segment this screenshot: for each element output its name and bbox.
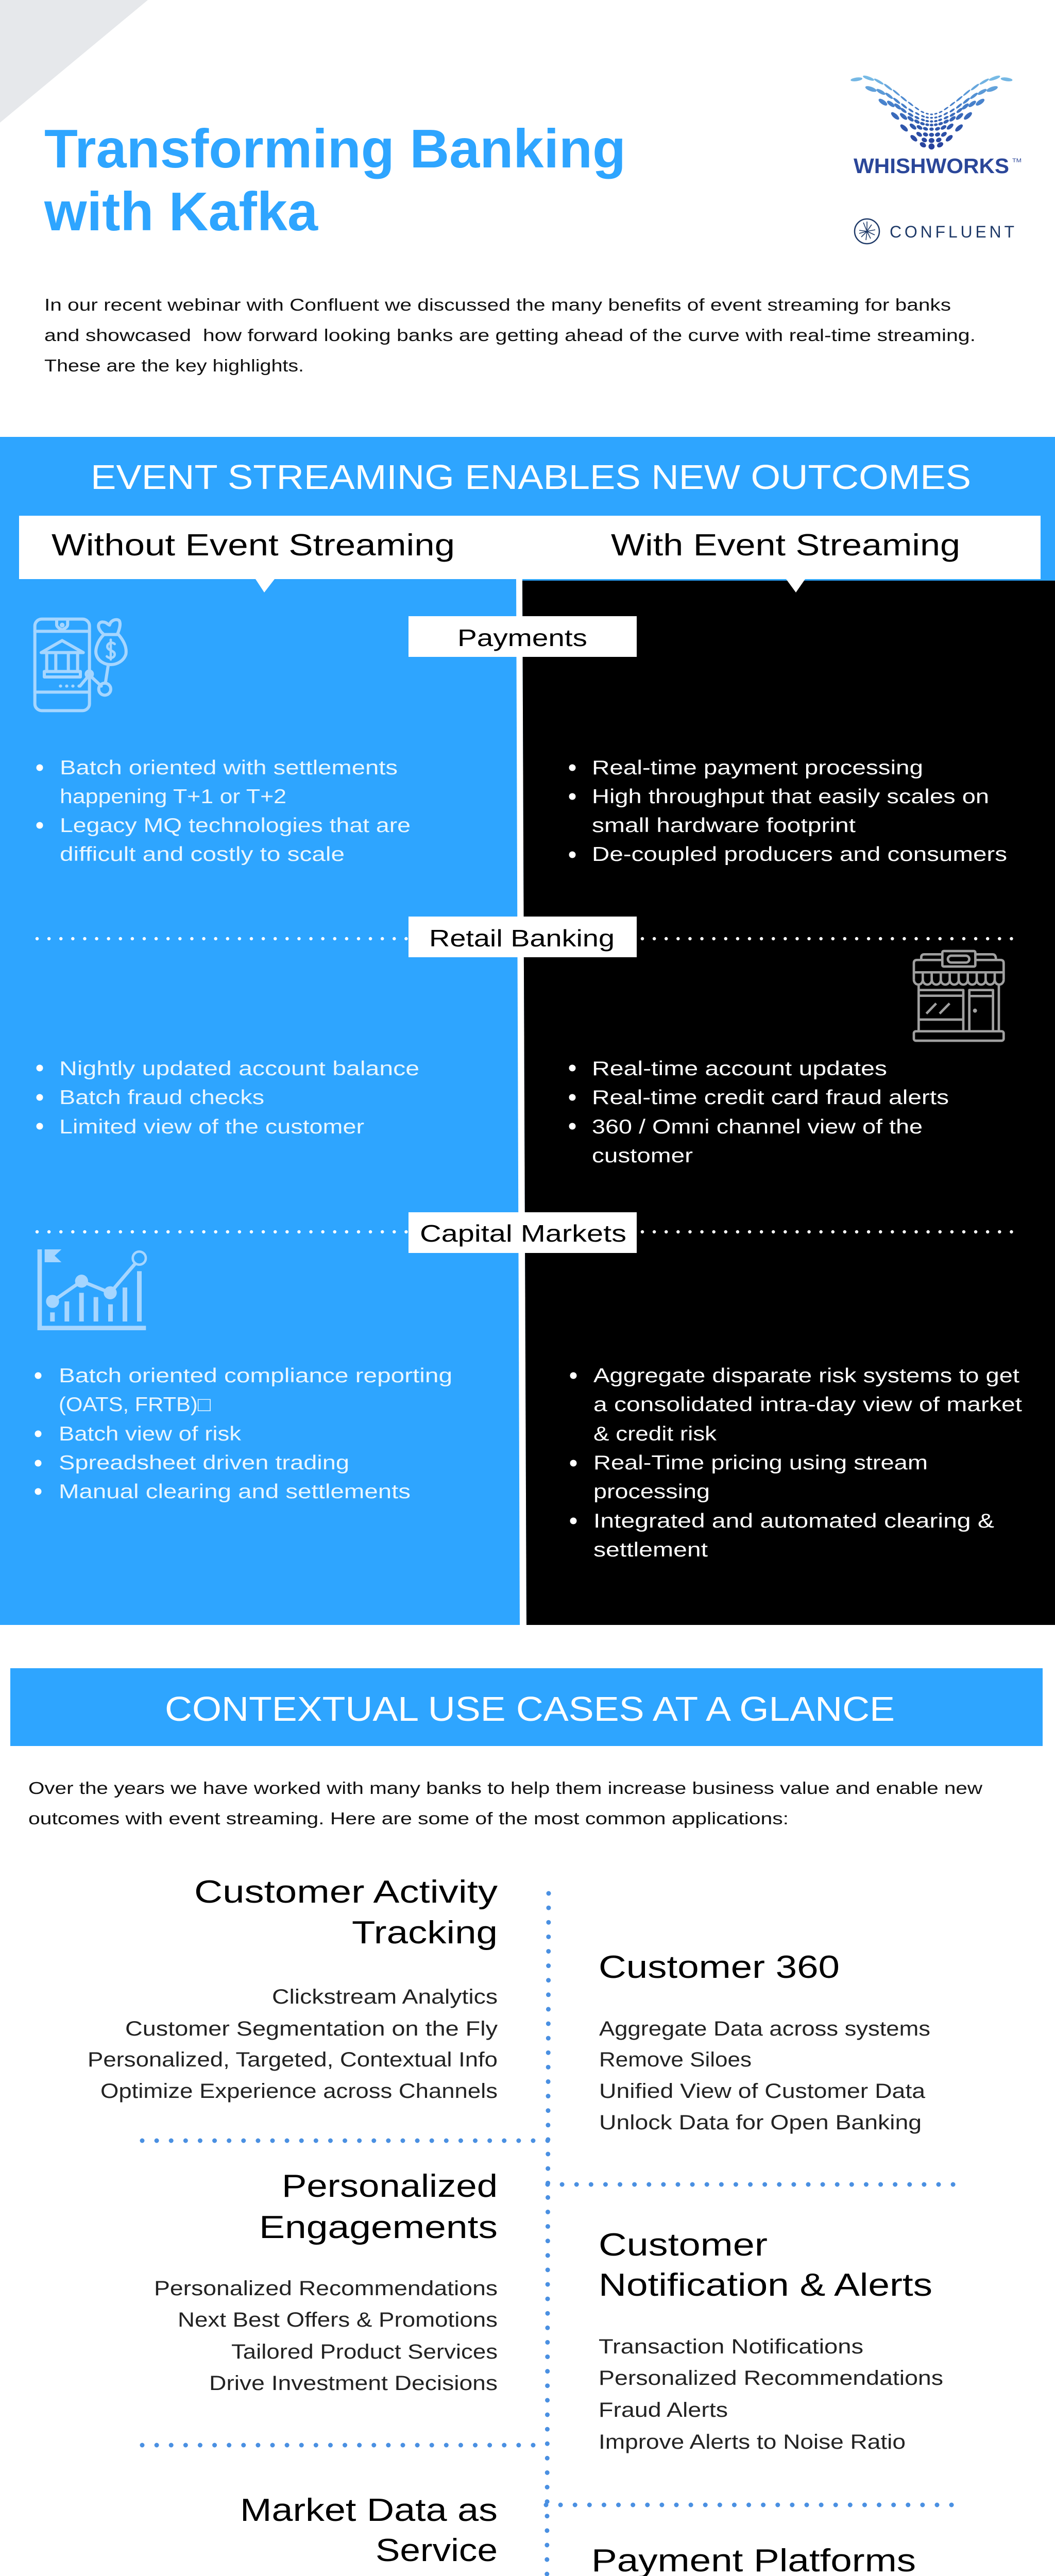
- retail banking: with event streaming: Real-time account updates: [592, 1058, 887, 1080]
- use case: Personalized Engagements: Drive Investment Decisions: [209, 2372, 498, 2395]
- label: Retail Banking: [409, 917, 637, 957]
- title: with Kafka: [44, 181, 318, 242]
- capital markets: with event streaming: Integrated and automated clearing &: [593, 1510, 994, 1532]
- retail banking: without event streaming: Limited view of the customer: [59, 1116, 364, 1138]
- use cases intro paragraph: outcomes with event streaming. Here are some of the most common applications:: [28, 1809, 789, 1828]
- icon: mobile banking: [35, 619, 126, 710]
- use case: Personalized Engagements: Next Best Offers & Promotions: [178, 2309, 498, 2331]
- retail banking: with event streaming: customer: [592, 1145, 693, 1167]
- retail banking: without event streaming: [36, 1058, 419, 1138]
- use case: Customer Notification & Alerts: Transaction Notifications: [599, 2335, 863, 2358]
- use case: Customer Activity Tracking: Personalized, Targeted, Contextual Info: [88, 2048, 498, 2071]
- use cases intro paragraph: Over the years we have worked with many banks to help them increase business value and enable new: [28, 1778, 982, 1798]
- heading: contextual use cases: [10, 1668, 1043, 1746]
- use case: Customer Activity Tracking: [88, 1874, 498, 2103]
- payments: with event streaming: small hardware footprint: [592, 815, 856, 837]
- payments: without event streaming: [36, 757, 411, 866]
- comparison header bar: [19, 516, 1041, 592]
- retail banking: with event streaming: 360 / Omni channel view of the: [592, 1116, 923, 1138]
- section heading: EVENT STREAMING ENABLES NEW OUTCOMES: [91, 458, 971, 497]
- icon: storefront: [914, 951, 1003, 1041]
- use case: Customer Activity Tracking: Customer Segmentation on the Fly: [125, 2018, 498, 2040]
- capital markets: with event streaming: [570, 1365, 1022, 1561]
- use case: Customer Activity Tracking: Customer Activity: [194, 1874, 498, 1910]
- logo: Whishworks: WHISHWORKS: [854, 154, 1009, 178]
- payments: with event streaming: De-coupled producers and consumers: [592, 843, 1007, 866]
- payments: with event streaming: Real-time payment processing: [592, 757, 923, 779]
- use case: Personalized Engagements: [154, 2168, 498, 2395]
- label: Retail Banking: Retail Banking: [429, 925, 615, 952]
- capital markets: with event streaming: & credit risk: [593, 1423, 717, 1445]
- use case: Customer Notification & Alerts: Improve Alerts to Noise Ratio: [599, 2431, 906, 2453]
- use case: Personalized Engagements: Engagements: [259, 2210, 498, 2245]
- use case: Personalized Engagements: Personalized: [282, 2168, 498, 2204]
- logo: Confluent: [855, 219, 1014, 244]
- capital markets: with event streaming: Real-Time pricing using stream: [593, 1452, 928, 1474]
- section background: [0, 437, 1055, 1625]
- header corner shape: [0, 0, 148, 123]
- use case: Customer Notification & Alerts: [599, 2227, 943, 2453]
- use case: Customer 360: Unified View of Customer Data: [599, 2080, 926, 2103]
- use case: Customer 360: Customer 360: [599, 1950, 840, 1985]
- label: Payments: [409, 616, 637, 657]
- use case: Customer 360: Unlock Data for Open Banking: [599, 2111, 922, 2134]
- retail banking: without event streaming: Nightly updated account balance: [59, 1058, 419, 1080]
- payments: without event streaming: Batch oriented with settlements: [60, 757, 398, 779]
- intro paragraph: In our recent webinar with Confluent we discussed the many benefits of event streaming for banks: [44, 295, 951, 314]
- capital markets: with event streaming: a consolidated intra-day view of market: [593, 1394, 1022, 1416]
- use case: Customer 360: Remove Siloes: [599, 2048, 752, 2071]
- capital markets: without event streaming: Batch oriented compliance reporting: [59, 1365, 452, 1387]
- capital markets: with event streaming: processing: [593, 1481, 710, 1503]
- title: Transforming Banking: [44, 118, 626, 179]
- capital markets: without event streaming: Spreadsheet driven trading: [59, 1452, 349, 1474]
- use case: Personalized Engagements: Personalized Recommendations: [154, 2277, 498, 2300]
- retail banking: with event streaming: [569, 1058, 949, 1167]
- use case: Customer Activity Tracking: Tracking: [352, 1915, 498, 1951]
- heading: contextual use cases: CONTEXTUAL USE CASES AT A GLANCE: [165, 1690, 895, 1728]
- payments: without event streaming: Legacy MQ technologies that are: [60, 815, 411, 837]
- comparison header bar: Without Event Streaming: [52, 528, 455, 562]
- panel: event streaming comparison: [0, 437, 1055, 1625]
- title: [44, 118, 626, 242]
- use cases intro paragraph: [28, 1778, 982, 1828]
- label: Capital Markets: Capital Markets: [420, 1220, 626, 1247]
- capital markets: without event streaming: Manual clearing and settlements: [59, 1481, 411, 1503]
- use case: Personalized Engagements: Tailored Product Services: [231, 2341, 498, 2363]
- capital markets: with event streaming: settlement: [593, 1539, 708, 1561]
- use case: Market Data as Service: Market Data as: [240, 2493, 498, 2528]
- retail banking: without event streaming: Batch fraud checks: [59, 1087, 264, 1109]
- use case: Customer Notification & Alerts: Customer: [599, 2227, 768, 2263]
- use case: Customer Activity Tracking: Clickstream Analytics: [272, 1986, 498, 2008]
- use case: Market Data as Service: Service: [376, 2533, 498, 2568]
- use case: Customer 360: Aggregate Data across systems: [599, 2018, 930, 2040]
- section divider gap: [516, 579, 526, 1625]
- capital markets: without event streaming: (OATS, FRTB)□: [59, 1394, 211, 1416]
- use case: Customer Notification & Alerts: Notification & Alerts: [599, 2267, 932, 2303]
- use case: Market Data as Service: [124, 2493, 498, 2576]
- use case: Customer 360: [599, 1950, 930, 2134]
- logo: Whishworks: [850, 75, 1022, 178]
- intro paragraph: and showcased how forward looking banks are getting ahead of the curve with real-time streaming.: [44, 326, 976, 345]
- payments: without event streaming: difficult and costly to scale: [60, 843, 345, 866]
- payments: without event streaming: happening T+1 or T+2: [60, 786, 286, 808]
- use case: Customer Notification & Alerts: Fraud Alerts: [599, 2399, 728, 2421]
- use case: Customer Notification & Alerts: Personalized Recommendations: [599, 2367, 943, 2389]
- retail banking: with event streaming: Real-time credit card fraud alerts: [592, 1087, 949, 1109]
- intro paragraph: These are the key highlights.: [44, 356, 304, 375]
- capital markets: without event streaming: [35, 1365, 452, 1503]
- label: Payments: Payments: [457, 624, 587, 651]
- capital markets: with event streaming: Aggregate disparate risk systems to get: [593, 1365, 1019, 1387]
- capital markets: without event streaming: Batch view of risk: [59, 1423, 242, 1445]
- label: Capital Markets: [409, 1212, 637, 1253]
- payments: with event streaming: High throughput that easily scales on: [592, 786, 989, 808]
- payments: with event streaming: [569, 757, 1007, 866]
- icon: growth chart: [38, 1249, 146, 1330]
- comparison header bar: With Event Streaming: [611, 528, 960, 562]
- use case: Customer Activity Tracking: Optimize Experience across Channels: [100, 2080, 498, 2103]
- intro paragraph: [44, 295, 976, 375]
- logo: Whishworks: TM: [1012, 158, 1022, 164]
- with event streaming dark panel: [522, 581, 1055, 1625]
- logo: Confluent: CONFLUENT: [890, 223, 1014, 241]
